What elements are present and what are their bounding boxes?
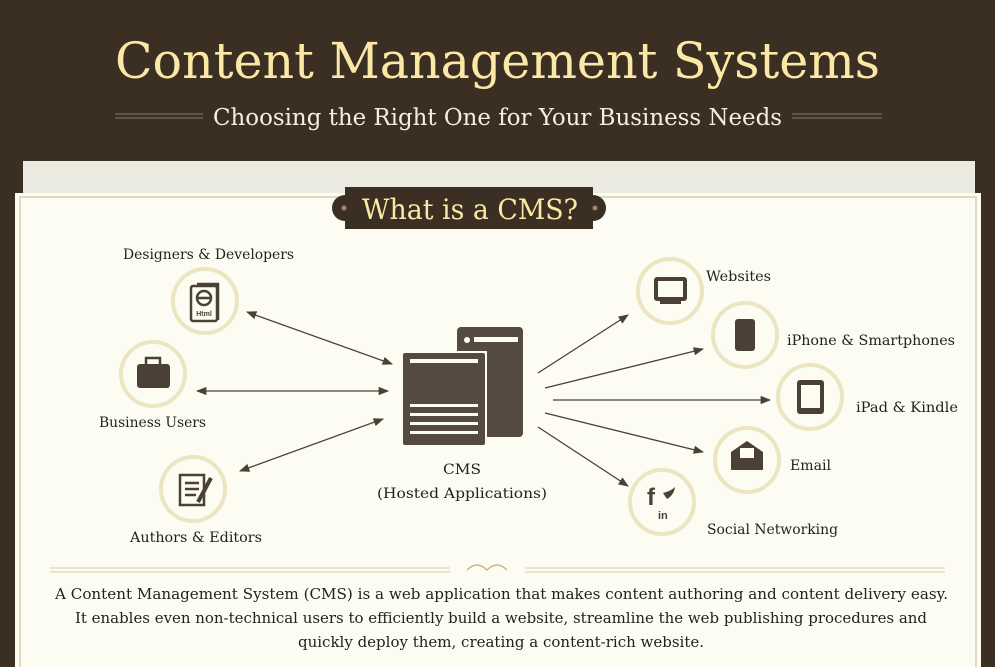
description: A Content Management System (CMS) is a web application that makes content authoring and content delivery easy.: [54, 585, 948, 603]
icon circles: [121, 259, 842, 534]
arrows: [197, 312, 770, 486]
CMS icon: [401, 327, 523, 447]
labels: Designers & Developers: [123, 247, 294, 263]
labels: [99, 247, 958, 546]
description: [54, 585, 948, 651]
icon: social: in: [658, 510, 668, 522]
badge: What is a CMS?: What is a CMS?: [362, 193, 578, 226]
icon: html doc: [191, 284, 218, 321]
subtitle: Choosing the Right One for Your Business Needs: [213, 105, 782, 131]
labels: Email: [790, 458, 832, 474]
icon: monitor: [654, 277, 687, 304]
labels: Business Users: [99, 415, 206, 431]
icon: tablet: [797, 380, 824, 414]
labels: (Hosted Applications): [377, 486, 547, 502]
icon: email: [731, 441, 763, 470]
icon: briefcase: [137, 358, 170, 388]
icon: social: [647, 484, 675, 522]
labels: iPhone & Smartphones: [787, 333, 955, 349]
labels: CMS: [443, 462, 481, 478]
icon: phone: [735, 319, 755, 351]
badge: What is a CMS?: [332, 187, 606, 229]
paper strip: [23, 161, 975, 201]
title: Content Management Systems: [115, 32, 880, 90]
description: quickly deploy them, creating a content-rich website.: [298, 633, 704, 651]
icon: notepad: [180, 475, 211, 505]
icon: social: f: [647, 484, 656, 511]
main panel: [15, 193, 981, 667]
description: It enables even non-technical users to efficiently build a website, streamline the web publishing procedures and: [75, 609, 927, 627]
labels: Authors & Editors: [129, 530, 262, 546]
labels: Websites: [706, 269, 771, 285]
labels: Social Networking: [707, 522, 838, 538]
divider: [50, 565, 945, 572]
icon: html doc: Html: [196, 311, 212, 318]
labels: iPad & Kindle: [856, 400, 958, 416]
